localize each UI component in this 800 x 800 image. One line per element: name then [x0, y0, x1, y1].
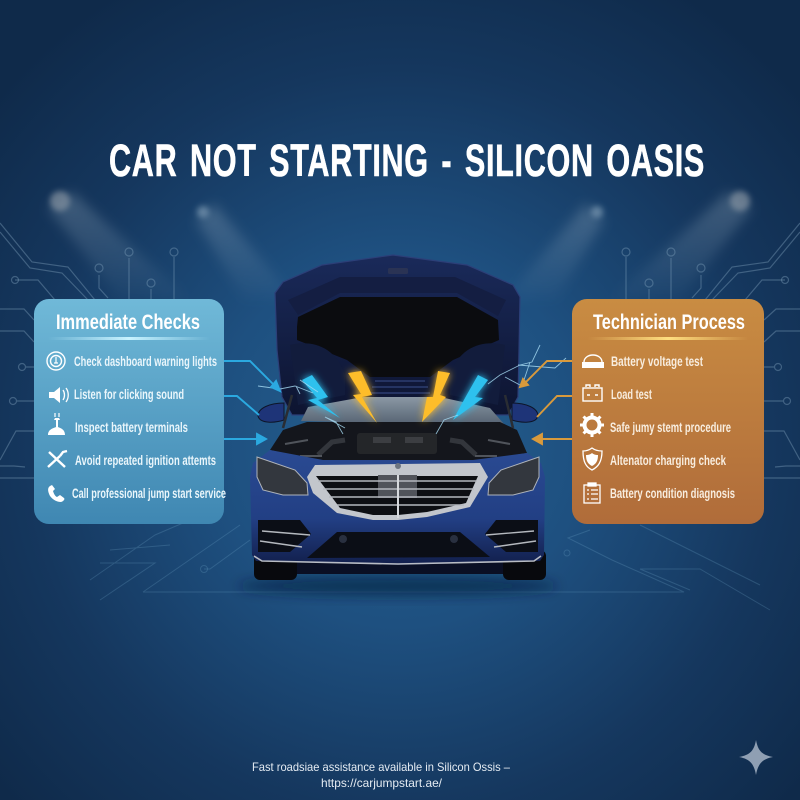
lightning bolts: [258, 345, 566, 434]
right headlight: [488, 457, 539, 495]
footer text: https://carjumpstart.ae/: [321, 776, 443, 790]
icon: battery: [583, 385, 602, 401]
item text: Altenator charging check: [610, 453, 726, 468]
icon: sparkle: [739, 740, 773, 775]
panel: technician process: [572, 299, 764, 524]
item text: Inspect battery terminals: [75, 420, 188, 435]
floor circuit lines: [90, 520, 770, 610]
arrows right: [520, 361, 572, 444]
icon: clipboard: [584, 483, 600, 503]
icon: shield: [583, 448, 602, 470]
footer text: Fast roadsiae assistance available in Silicon Ossis –: [252, 760, 510, 774]
grille: [307, 463, 488, 520]
panel: immediate checks: [34, 299, 226, 524]
item text: Battery voltage test: [611, 354, 703, 369]
item text: Avoid repeated ignition attemts: [75, 453, 216, 468]
engine bay: [270, 395, 527, 462]
item text: Load test: [611, 387, 652, 402]
item text: Battery condition diagnosis: [610, 486, 735, 501]
icon: voltage meter: [582, 355, 604, 368]
circuit lines right: [622, 223, 800, 478]
blue bolts: [302, 375, 488, 420]
icon: gauge: [47, 352, 65, 370]
item text: Safe jumy stemt procedure: [610, 420, 731, 435]
yellow bolts: [348, 371, 450, 423]
open hood: [275, 255, 520, 415]
bumper trim: [254, 556, 541, 564]
icon: phone: [48, 485, 64, 502]
icon: battery terminal: [48, 413, 65, 435]
circuit lines left: [0, 223, 178, 478]
side mirrors: [258, 403, 538, 422]
heading: immediate checks: Immediate Checks: [56, 311, 200, 334]
icon: tools: [48, 451, 67, 467]
arrows left: [224, 361, 280, 444]
left headlight: [257, 457, 308, 495]
electric arcs: [258, 345, 566, 434]
car: [238, 255, 558, 596]
footer text: [252, 760, 510, 790]
item text: Call professional jump start service: [72, 486, 226, 501]
tires: [254, 550, 546, 580]
spotlights: [48, 191, 752, 300]
icon: gear: [580, 413, 604, 437]
car body: [250, 450, 545, 565]
heading: technician process: Technician Process: [593, 311, 745, 334]
icon: speaker: [49, 387, 68, 403]
windshield: [301, 397, 504, 424]
car shadow: [238, 576, 558, 596]
side vents: [258, 520, 538, 552]
lower air intake: [307, 532, 490, 558]
item text: Check dashboard warning lights: [74, 354, 217, 369]
item text: Listen for clicking sound: [74, 387, 184, 402]
